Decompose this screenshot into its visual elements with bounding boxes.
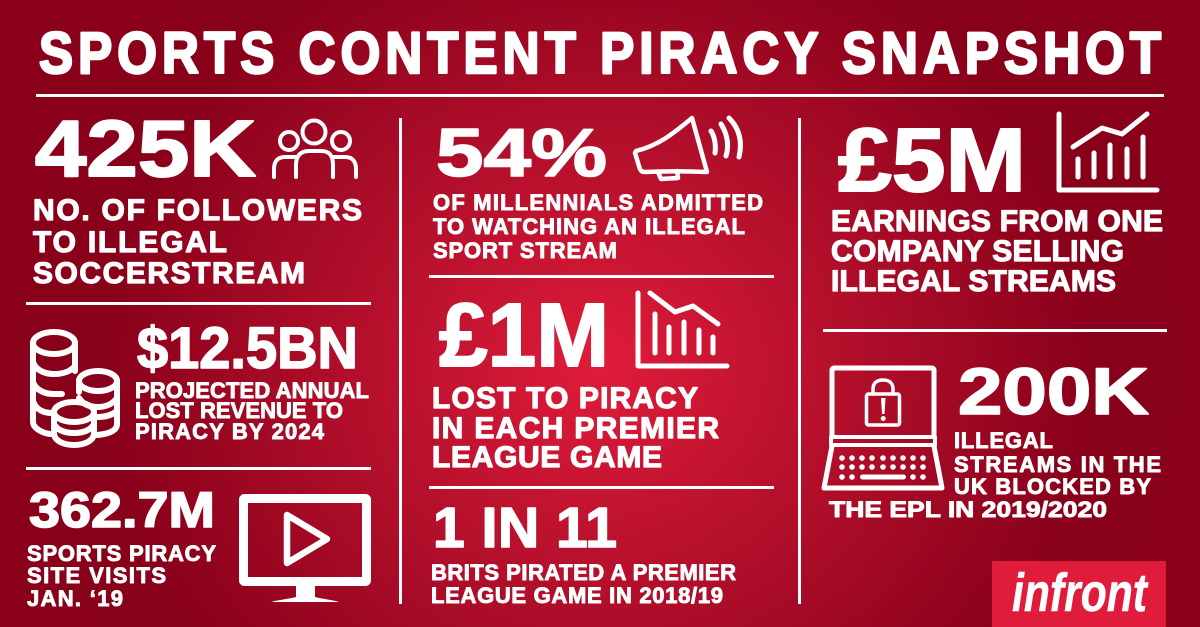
label: lost revenue: LOST REVENUE TO	[135, 398, 343, 423]
stat: 54% millennials: 54%	[436, 115, 607, 191]
label: brits: BRITS PIRATED A PREMIER	[431, 560, 736, 585]
stat: 1 in 11: 1 IN 11	[433, 496, 617, 560]
icon: tv with play button	[244, 498, 366, 602]
label: millennials	[433, 190, 763, 263]
label: lost per game: LEAGUE GAME	[432, 441, 662, 474]
label: brits: LEAGUE GAME IN 2018/19	[431, 583, 723, 608]
label: followers: NO. OF FOLLOWERS	[33, 194, 362, 227]
stat: £5M earnings	[831, 111, 1163, 298]
label: lost per game: IN EACH PREMIER	[432, 412, 719, 445]
stat: £1M per game: £1M	[439, 286, 609, 386]
label: lost per game	[432, 382, 719, 474]
stat: 54% millennials	[433, 115, 763, 263]
stat: 1 in 11	[431, 496, 736, 608]
stat: £5M earnings: £5M	[838, 111, 1026, 211]
label: earnings: COMPANY SELLING	[831, 235, 1124, 268]
stat: $12.5BN lost revenue	[33, 316, 369, 445]
label: blocked streams: STREAMS IN THE	[954, 452, 1161, 477]
label: site visits	[27, 541, 216, 611]
label: lost revenue: PIRACY BY 2024	[135, 419, 325, 444]
stat: 362.7M site visits	[27, 482, 366, 611]
logo: infront: infront	[1012, 563, 1149, 623]
stat: 425K followers	[33, 104, 362, 290]
icon: megaphone	[635, 118, 740, 179]
label: millennials: OF MILLENNIALS ADMITTED	[433, 190, 763, 215]
stat: 200K blocked	[824, 354, 1161, 522]
icon: coin stacks	[33, 332, 117, 445]
label: lost revenue	[135, 378, 369, 444]
label: site visits: JAN. ‘19	[27, 586, 123, 611]
label: lost per game: LOST TO PIRACY	[432, 382, 698, 415]
stat: 200K blocked: 200K	[958, 354, 1149, 428]
label: followers: TO ILLEGAL	[33, 226, 227, 259]
label: blocked streams: ILLEGAL	[954, 428, 1053, 453]
label: blocked streams	[829, 428, 1161, 522]
label: brits	[431, 560, 736, 608]
icon: falling chart	[638, 293, 727, 366]
label: millennials: TO WATCHING AN ILLEGAL	[433, 214, 745, 239]
label: earnings: EARNINGS FROM ONE	[831, 205, 1163, 238]
icon: rising chart	[1059, 114, 1157, 190]
label: lost revenue: PROJECTED ANNUAL	[135, 378, 369, 403]
label: followers: SOCCERSTREAM	[33, 257, 305, 290]
stat: £1M per game	[432, 286, 727, 474]
label: blocked streams: THE EPL IN 2019/2020	[829, 497, 1107, 522]
label: earnings: ILLEGAL STREAMS	[831, 265, 1116, 298]
label: earnings	[831, 205, 1163, 298]
label: millennials: SPORT STREAM	[433, 238, 617, 263]
icon: people	[274, 120, 356, 177]
icon: laptop with padlock	[824, 368, 942, 488]
stat: 425K followers: 425K	[35, 104, 256, 193]
stat: $12.5BN lost revenue: $12.5BN	[137, 316, 358, 381]
label: blocked streams: UK BLOCKED BY	[954, 474, 1151, 499]
label: site visits: SITE VISITS	[27, 563, 166, 588]
title: SPORTS CONTENT PIRACY SNAPSHOT	[39, 21, 1161, 86]
label: followers	[33, 194, 362, 290]
label: site visits: SPORTS PIRACY	[27, 541, 216, 566]
stat: 362.7M site visits: 362.7M	[29, 482, 215, 538]
